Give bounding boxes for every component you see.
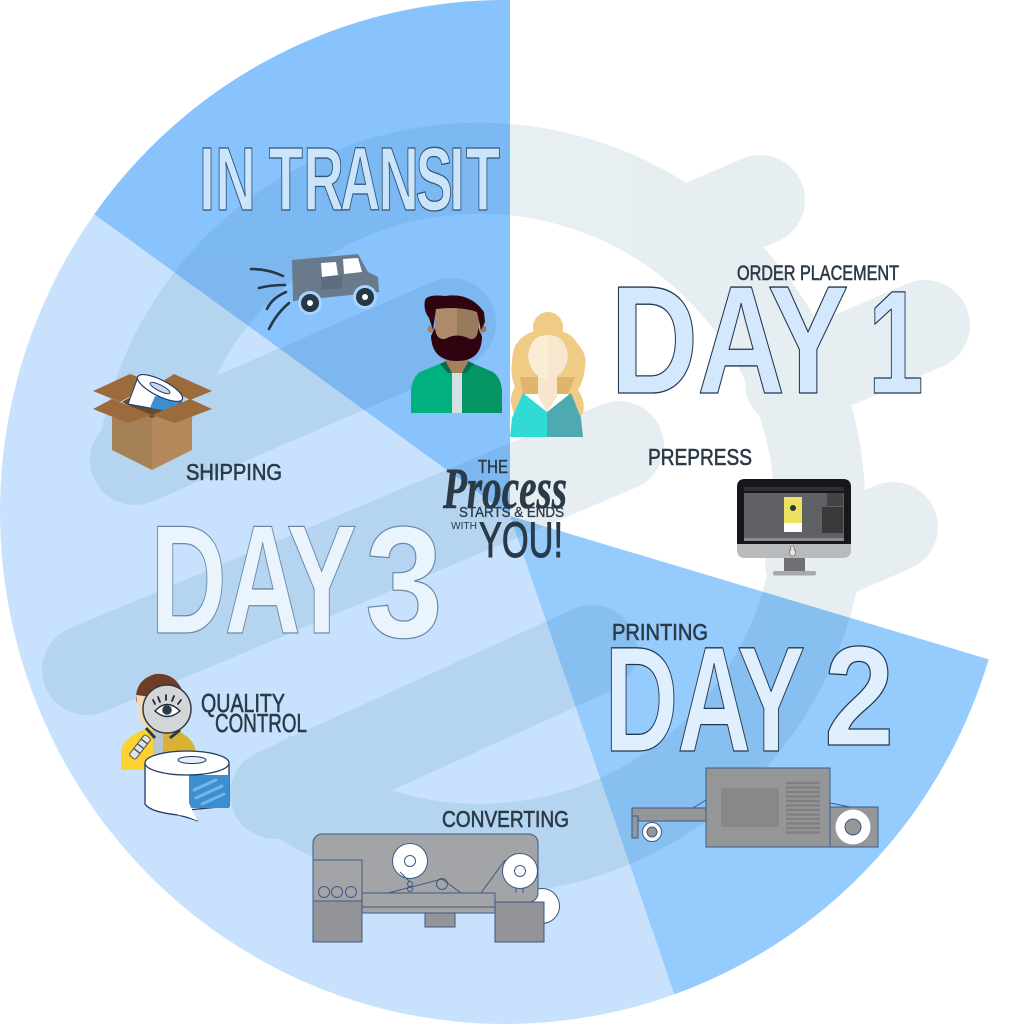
label: order placement: ORDER PLACEMENT <box>737 261 899 285</box>
label: quality control <box>201 688 307 738</box>
icon: converting machine <box>313 834 560 942</box>
heading: day 1: DAY <box>610 254 849 426</box>
center tagline <box>442 456 567 568</box>
center tagline: WITH <box>451 521 477 532</box>
heading: in transit: IN TRANSIT <box>199 128 500 229</box>
wedge: in transit <box>94 0 510 516</box>
heading: day 3: DAY <box>151 494 357 667</box>
label: printing: PRINTING <box>612 619 708 645</box>
label: quality control: CONTROL <box>215 708 307 738</box>
icon: woman <box>510 312 586 437</box>
icon: man <box>411 295 502 413</box>
icon: desktop monitor <box>737 479 851 576</box>
heading: day 3 <box>151 493 443 671</box>
label: shipping: SHIPPING <box>186 459 282 485</box>
icon: shipping box <box>93 370 212 470</box>
wedge: day 3 <box>0 146 690 1024</box>
icon: printing press <box>632 768 878 847</box>
center tagline: THE <box>478 457 508 477</box>
label: converting: CONVERTING <box>442 806 569 832</box>
center tagline: STARTS & ENDS <box>459 505 564 521</box>
icon: quality control inspector <box>121 674 229 821</box>
heading: day 2: 2 <box>824 617 894 776</box>
center tagline: Process <box>442 456 567 521</box>
heading: day 3: 3 <box>365 493 443 671</box>
heading: day 2 <box>605 617 894 784</box>
icon: delivery truck <box>251 254 379 329</box>
watermark logo <box>87 168 925 849</box>
heading: day 2: DAY <box>605 617 805 784</box>
label: quality control: QUALITY <box>201 688 285 718</box>
center tagline: YOU! <box>479 512 563 568</box>
label: prepress: PREPRESS <box>648 444 752 470</box>
heading: day 1: 1 <box>868 260 924 425</box>
wedge: day 2 <box>510 516 1011 1024</box>
